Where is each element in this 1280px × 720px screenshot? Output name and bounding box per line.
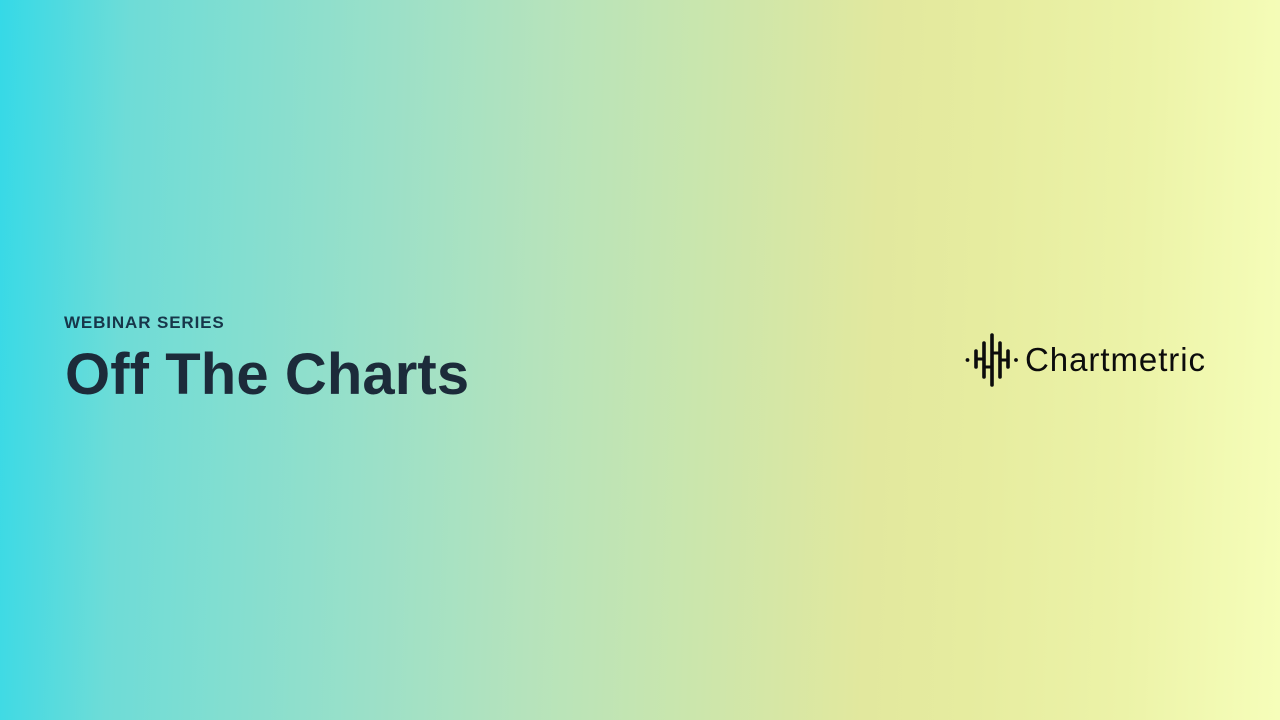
logo: Chartmetric: [966, 333, 1206, 387]
eyebrow: webinar series: WEBINAR SERIES: [64, 313, 225, 332]
icon: sound wave mark: [966, 333, 1018, 387]
title: Off The Charts: Off The Charts: [65, 342, 469, 407]
wordmark: Chartmetric: [1025, 341, 1206, 378]
